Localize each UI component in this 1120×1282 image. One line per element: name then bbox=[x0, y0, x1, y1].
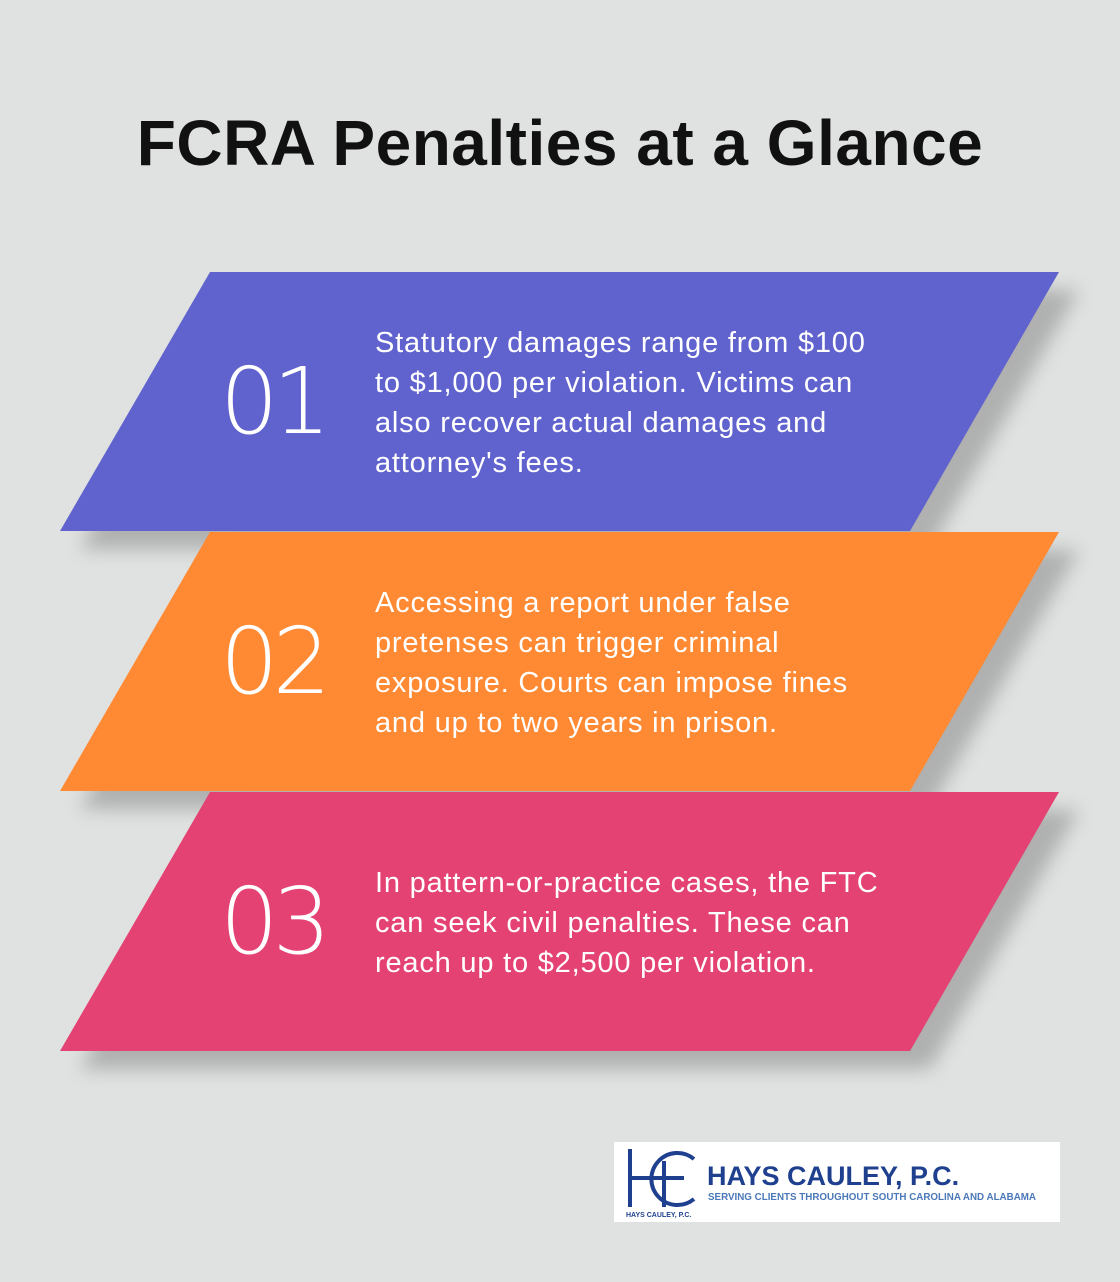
logo bbox=[614, 1142, 1060, 1222]
panel 3 number: 03 bbox=[220, 868, 325, 975]
band 2 bbox=[60, 532, 1059, 791]
panel 1 text: to $1,000 per violation. Victims can bbox=[375, 367, 853, 399]
panel 1 text: also recover actual damages and bbox=[375, 407, 827, 439]
panel 1 text: Statutory damages range from $100 bbox=[375, 327, 866, 359]
panel 3 text: reach up to $2,500 per violation. bbox=[375, 947, 816, 979]
panel 2 text: Accessing a report under false bbox=[375, 587, 791, 619]
panel 2 text: and up to two years in prison. bbox=[375, 707, 778, 739]
panel 2 number: 02 bbox=[220, 608, 325, 715]
panel 2 text bbox=[375, 587, 848, 739]
band 3 bbox=[60, 792, 1059, 1051]
panel 3 text: In pattern-or-practice cases, the FTC bbox=[375, 867, 878, 899]
panel 1 number: 01 bbox=[220, 348, 325, 455]
panel 1 text bbox=[375, 327, 866, 479]
band 1 bbox=[60, 272, 1059, 531]
logo tagline: SERVING CLIENTS THROUGHOUT SOUTH CAROLINA AND ALABAMA bbox=[708, 1192, 1036, 1203]
logo name: HAYS CAULEY, P.C. bbox=[707, 1161, 959, 1191]
panel 2 text: pretenses can trigger criminal bbox=[375, 627, 779, 659]
logo: HAYS CAULEY, P.C. bbox=[626, 1212, 691, 1219]
icon: HC monogram bbox=[628, 1149, 696, 1207]
panel 3 text: can seek civil penalties. These can bbox=[375, 907, 851, 939]
title: FCRA Penalties at a Glance bbox=[137, 107, 983, 179]
panel 2 text: exposure. Courts can impose fines bbox=[375, 667, 848, 699]
panel 3 text bbox=[375, 867, 878, 979]
panel 1 text: attorney's fees. bbox=[375, 447, 584, 479]
